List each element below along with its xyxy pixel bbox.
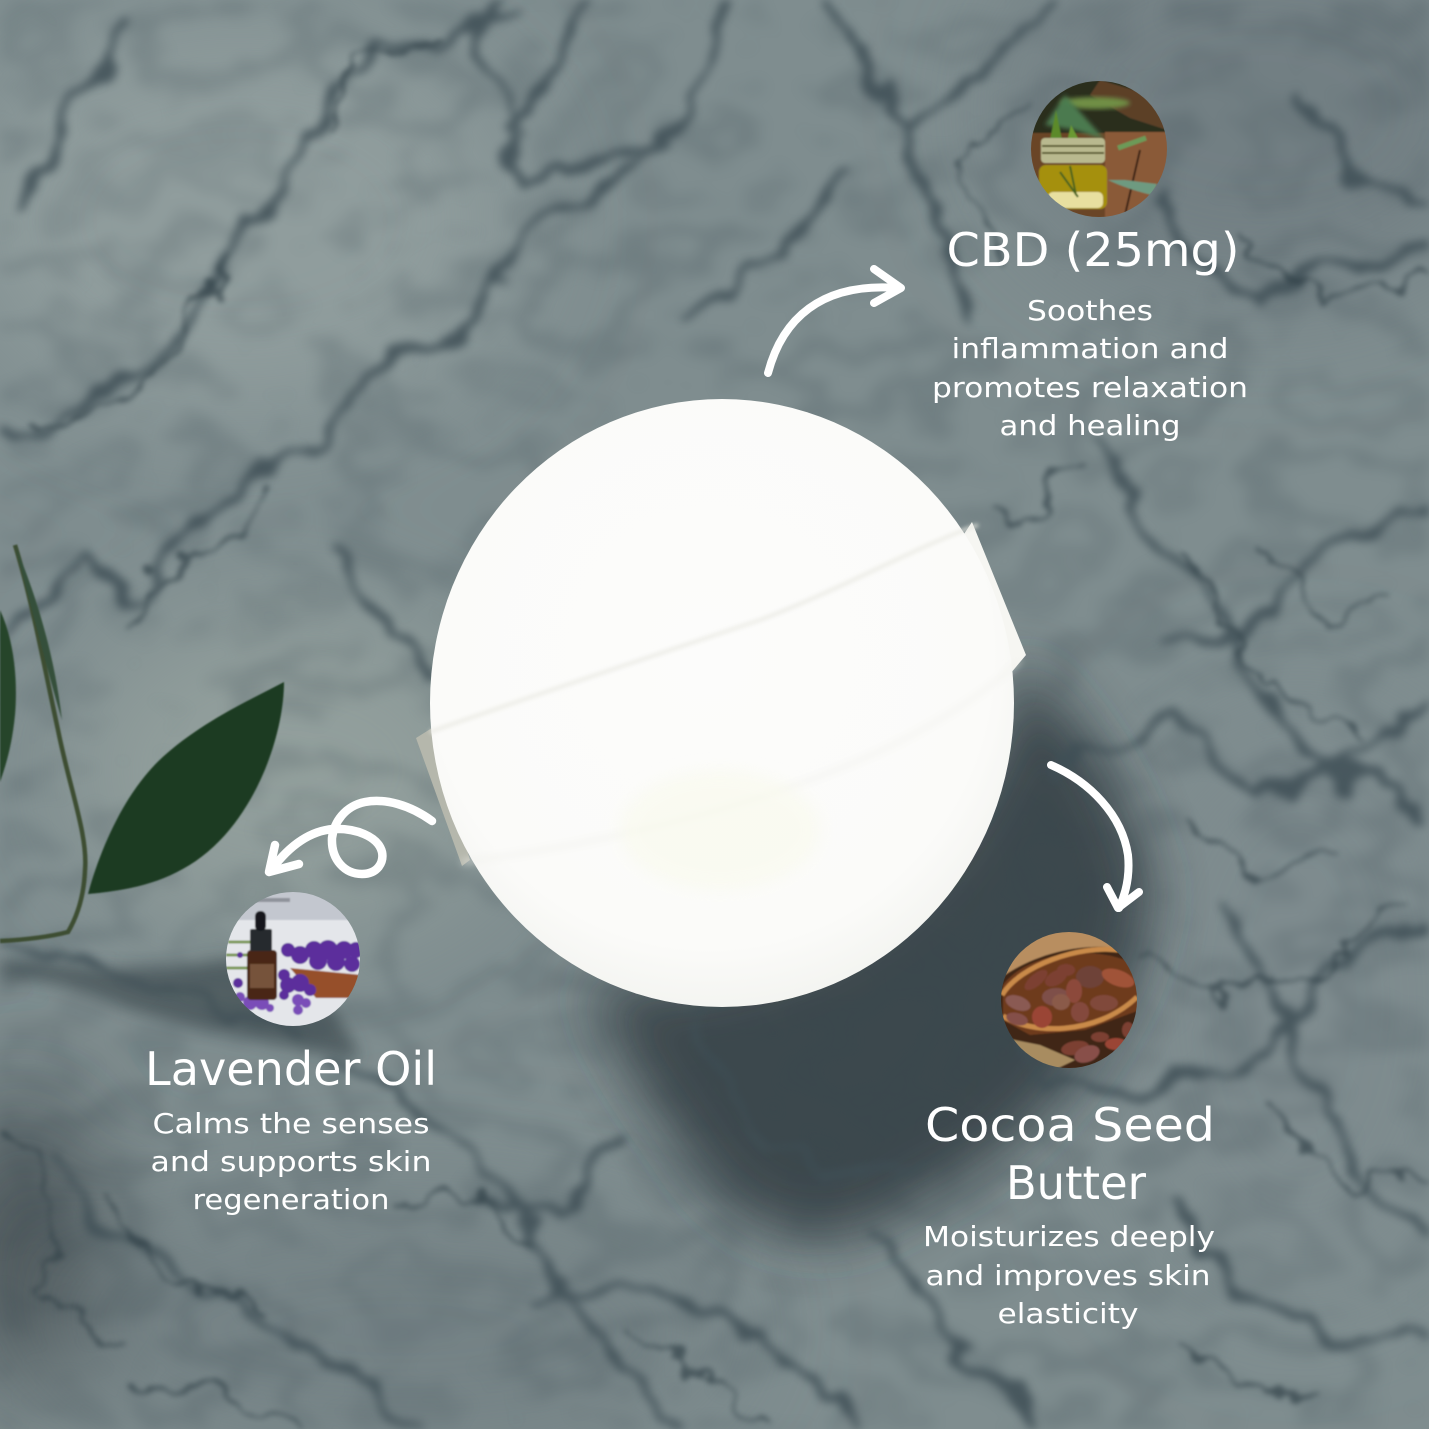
stem <box>0 545 85 941</box>
heading: CBD: CBD (25mg) <box>946 223 1240 277</box>
description: CBD: inflammation and <box>952 332 1228 365</box>
icon: CBD oil jar <box>1031 81 1167 217</box>
description: CBD: promotes relaxation <box>932 371 1248 404</box>
thin leaf <box>15 545 62 720</box>
callout: Cocoa Seed Butter <box>923 765 1215 1330</box>
shadow of the bath bomb <box>590 660 1151 1239</box>
description: Lavender Oil <box>150 1107 432 1216</box>
description: Cocoa Seed Butter: Moisturizes deeply <box>923 1220 1215 1253</box>
description: CBD: and healing <box>1000 409 1180 442</box>
right lip <box>960 522 1026 680</box>
description: Lavender Oil: regeneration <box>192 1183 390 1216</box>
callout: Lavender Oil <box>145 801 437 1216</box>
description: Cocoa Seed Butter: elasticity <box>998 1297 1138 1330</box>
icon: lavender oil bottle <box>226 892 360 1026</box>
description: CBD: Soothes <box>1027 294 1153 327</box>
left lip <box>416 728 470 866</box>
description: Cocoa Seed Butter <box>923 1220 1215 1330</box>
arrow to Cocoa <box>1051 765 1139 908</box>
lower seam <box>462 660 1020 862</box>
description: Cocoa Seed Butter: and improves skin <box>926 1259 1210 1292</box>
edge leaf <box>0 610 16 782</box>
sphere <box>430 399 1014 1007</box>
callout: CBD <box>768 75 1248 442</box>
description: CBD <box>932 294 1248 442</box>
bath bomb <box>416 399 1026 1007</box>
description: Lavender Oil: Calms the senses <box>152 1107 430 1140</box>
description: Lavender Oil: and supports skin <box>150 1145 432 1178</box>
arrow to Lavender <box>269 801 432 874</box>
heading: Lavender Oil: Lavender Oil <box>145 1042 437 1096</box>
plant: leaves and stem <box>0 545 284 941</box>
icon: cocoa beans <box>1001 932 1137 1068</box>
large leaf <box>88 682 284 894</box>
heading: Cocoa Seed Butter: Cocoa Seed <box>925 1098 1215 1152</box>
arrow to CBD <box>768 269 901 373</box>
shadow of the leaf <box>0 959 360 1060</box>
heading: Cocoa Seed Butter <box>925 1098 1215 1210</box>
yellow speckle <box>620 770 820 890</box>
heading: Cocoa Seed Butter: Butter <box>1006 1156 1146 1210</box>
upper seam <box>430 525 978 732</box>
